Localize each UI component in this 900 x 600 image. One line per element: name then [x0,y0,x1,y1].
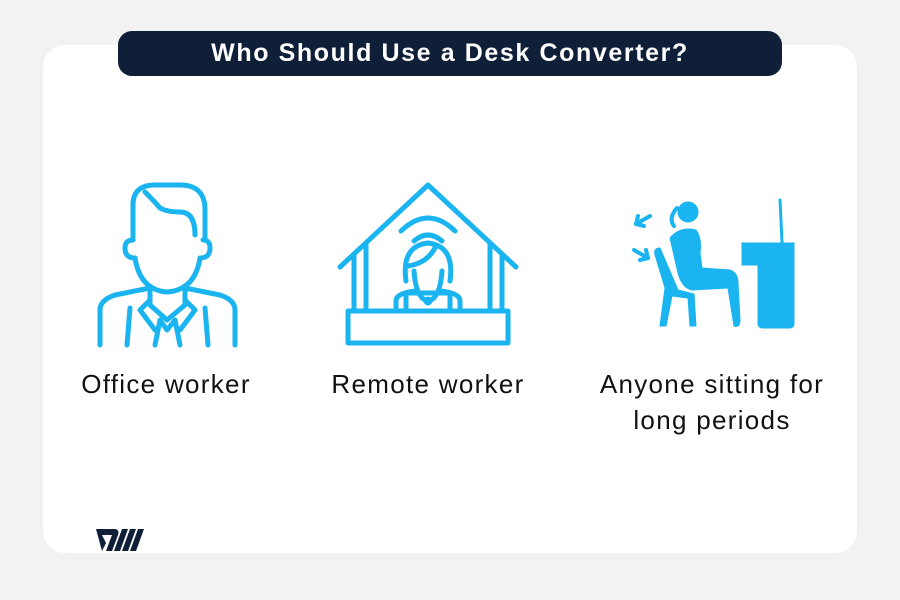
text: anyone sitting: Anyone sitting for [600,369,824,399]
icon: person sitting with back pain [632,198,794,328]
text: office worker: Office worker [81,369,251,399]
text: remote worker: Remote worker [331,369,525,399]
icon: office worker [98,182,238,348]
title: Who Should Use a Desk Converter? [211,39,689,67]
panel: main card [43,45,857,553]
icon: remote worker house [338,182,518,346]
text: anyone sitting: long periods [633,405,791,435]
title [118,31,782,76]
text: anyone sitting [600,369,824,435]
logo [96,529,144,551]
